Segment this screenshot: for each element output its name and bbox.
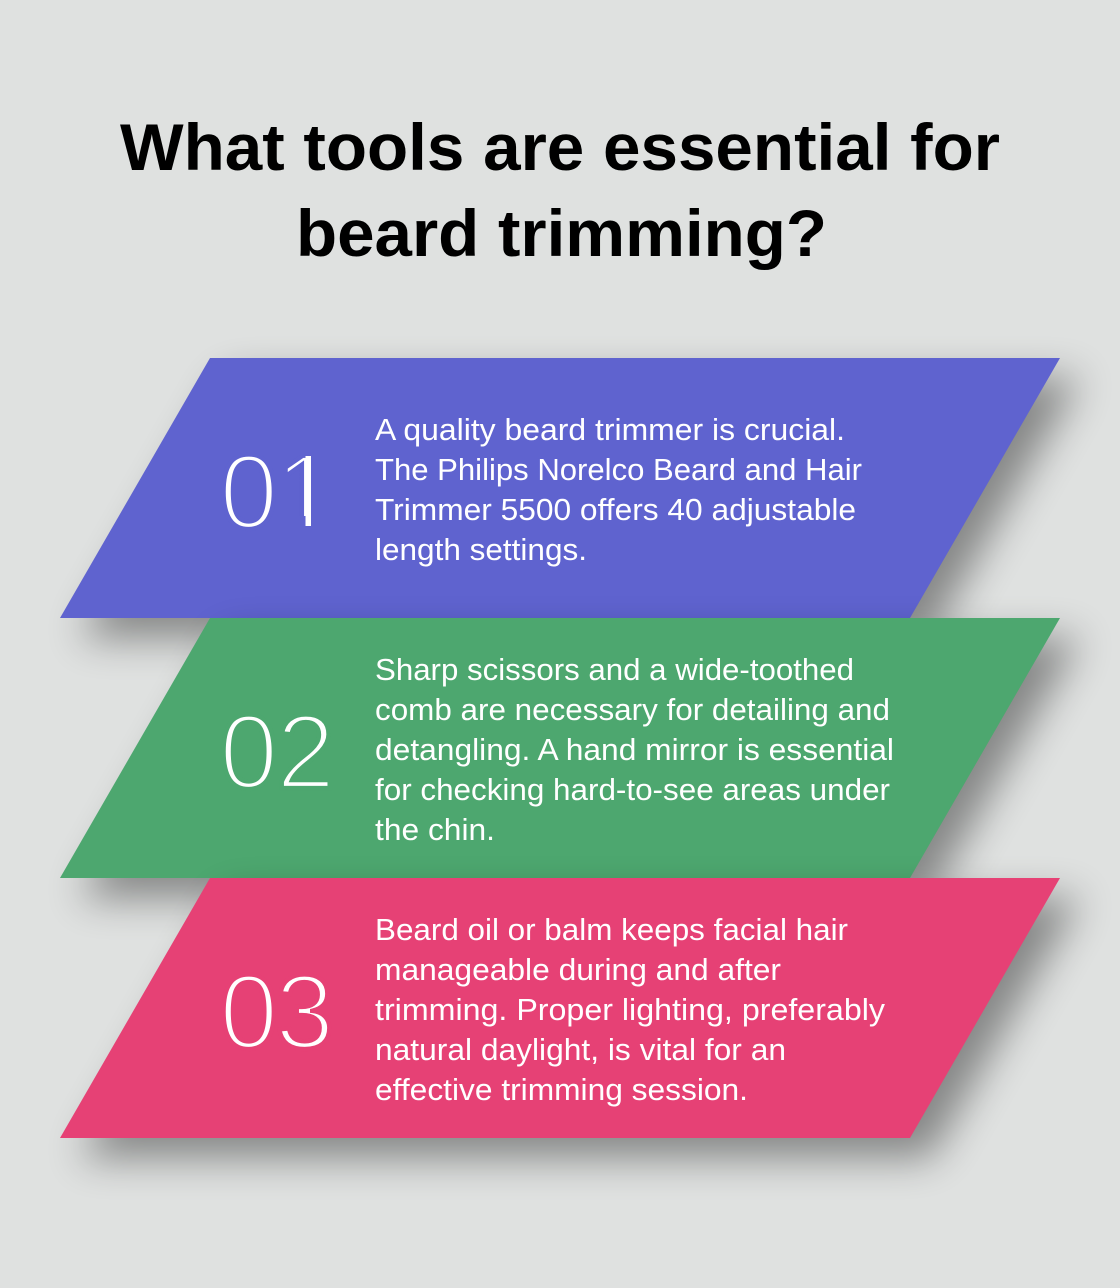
title [120,110,1000,270]
panel: step 02 [60,618,1080,898]
text block 03: Beard oil or balm keeps facial hair [375,912,848,947]
panel: step 03 [60,878,1080,1158]
text block 01: Trimmer 5500 offers 40 adjustable [375,492,856,527]
title: What tools are essential for [120,110,1000,184]
text block 02: detangling. A hand mirror is essential [375,732,894,767]
text block 01: length settings. [375,532,587,567]
text block 02: the chin. [375,812,495,847]
text block 02 [375,652,894,847]
number 02: 02 [220,694,335,811]
text block 03: effective trimming session. [375,1072,748,1107]
text block 01 [375,412,862,567]
text block 01: The Philips Norelco Beard and Hair [375,452,862,487]
number 03: 03 [220,954,334,1071]
text block 02: for checking hard-to-see areas under [375,772,890,807]
text block 03: trimming. Proper lighting, preferably [375,992,886,1027]
title: beard trimming? [296,196,827,270]
panel: step 01 [60,358,1080,638]
number 01: 01 [220,434,334,551]
text block 02: comb are necessary for detailing and [375,692,890,727]
text block 01: A quality beard trimmer is crucial. [375,412,845,447]
text block 03: manageable during and after [375,952,781,987]
text block 02: Sharp scissors and a wide-toothed [375,652,854,687]
text block 03: natural daylight, is vital for an [375,1032,786,1067]
text block 03 [375,912,886,1107]
